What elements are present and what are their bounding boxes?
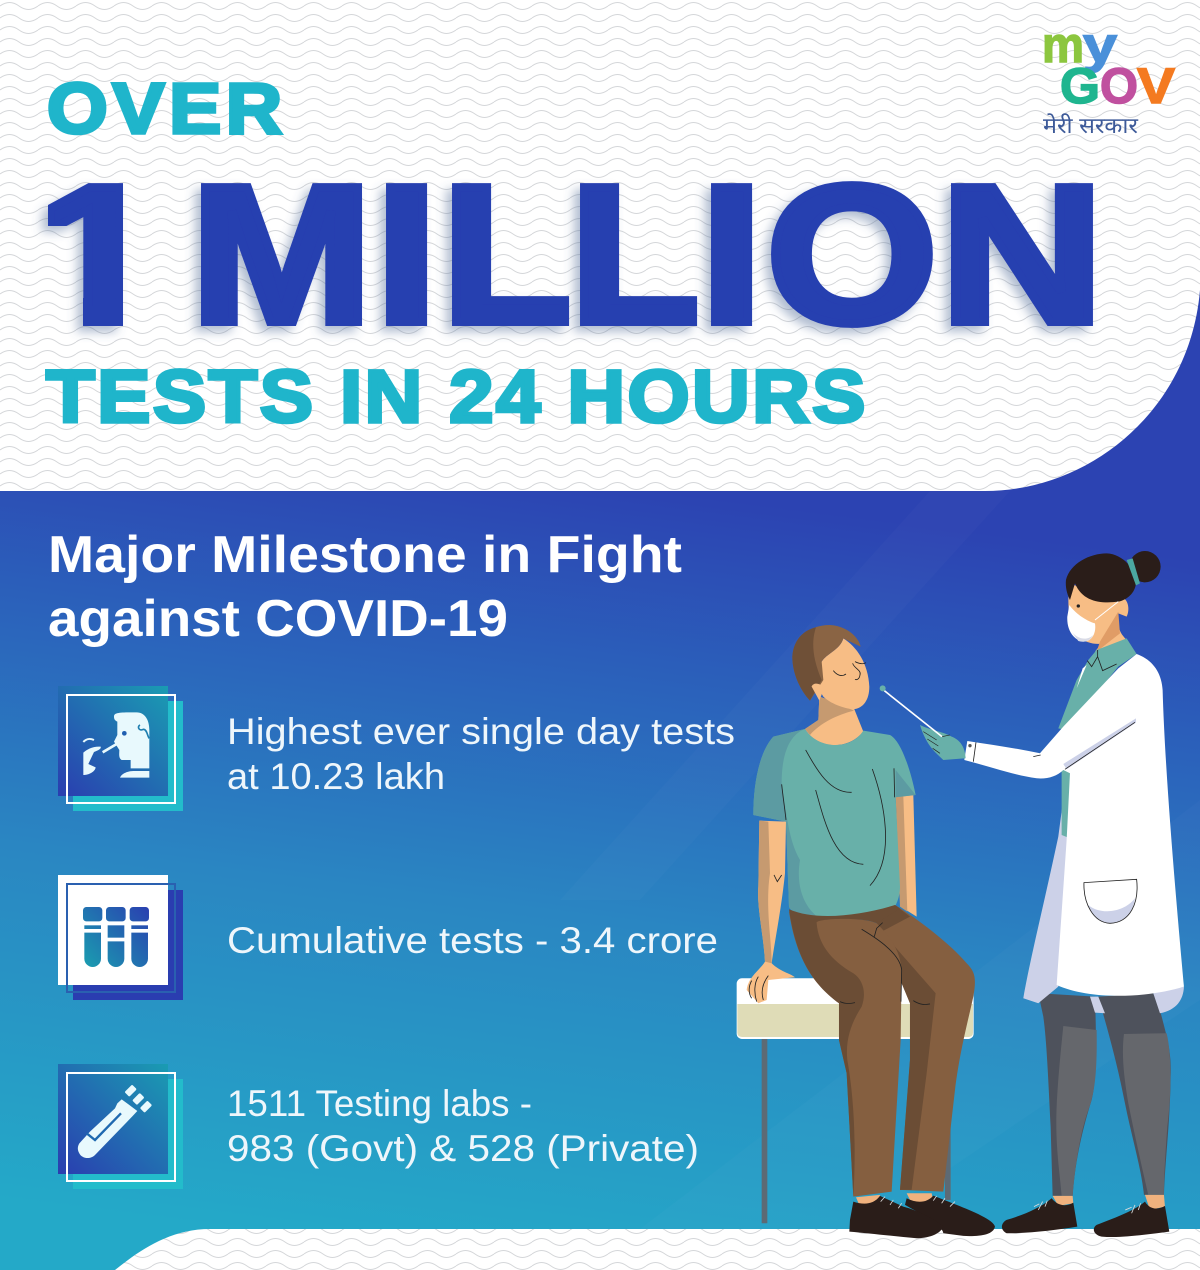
title: 1 million: I: [701, 145, 762, 364]
title: 1 million: 1: [33, 145, 164, 364]
doctor: [880, 551, 1184, 1237]
heading: major milestone: Major Milestone in Fight: [48, 526, 682, 584]
text: highest ever: [227, 711, 735, 797]
title: tests in 24 hours: TESTS IN 24 HOURS: [46, 356, 868, 438]
text: testing labs: [227, 1083, 699, 1169]
title: 1 million: O: [766, 145, 938, 364]
stool: [737, 978, 974, 1223]
title: 1 million: N: [940, 145, 1104, 364]
icon: nasal swab: [58, 686, 183, 811]
text: testing labs: 1511 Testing labs -: [227, 1083, 532, 1124]
heading: major milestone: [48, 526, 682, 648]
title: 1 million: L: [570, 146, 699, 364]
patient: [747, 625, 995, 1238]
icon: test tubes: [58, 875, 183, 1000]
title: 1 million: I: [376, 145, 437, 364]
logo: myGov: मेरी सरकार: [1043, 113, 1139, 138]
logo: myGov: V: [1137, 58, 1176, 114]
text: highest ever: at 10.23 lakh: [227, 756, 445, 797]
logo: myGov: m: [1042, 17, 1084, 73]
logo: myGov: [1042, 17, 1176, 138]
blue gradient panel: [0, 290, 1200, 1270]
icon: sample tube: [58, 1064, 183, 1189]
logo: myGov: G: [1060, 58, 1100, 114]
title: over: OVER: [47, 68, 287, 148]
text: highest ever: Highest ever single day tests: [227, 711, 735, 752]
title: 1 million: L: [442, 146, 571, 364]
illustration: patient and doctor: [737, 551, 1184, 1238]
text: testing labs: 983 (Govt) & 528 (Private): [227, 1128, 699, 1169]
title: 1 million: M: [191, 145, 372, 364]
logo: myGov: y: [1083, 17, 1117, 73]
text: cumulative tests: Cumulative tests - 3.4 crore: [227, 920, 718, 961]
title: 1 million: [36, 181, 1093, 340]
logo: myGov: O: [1100, 58, 1138, 114]
heading: major milestone: against COVID-19: [48, 590, 508, 648]
